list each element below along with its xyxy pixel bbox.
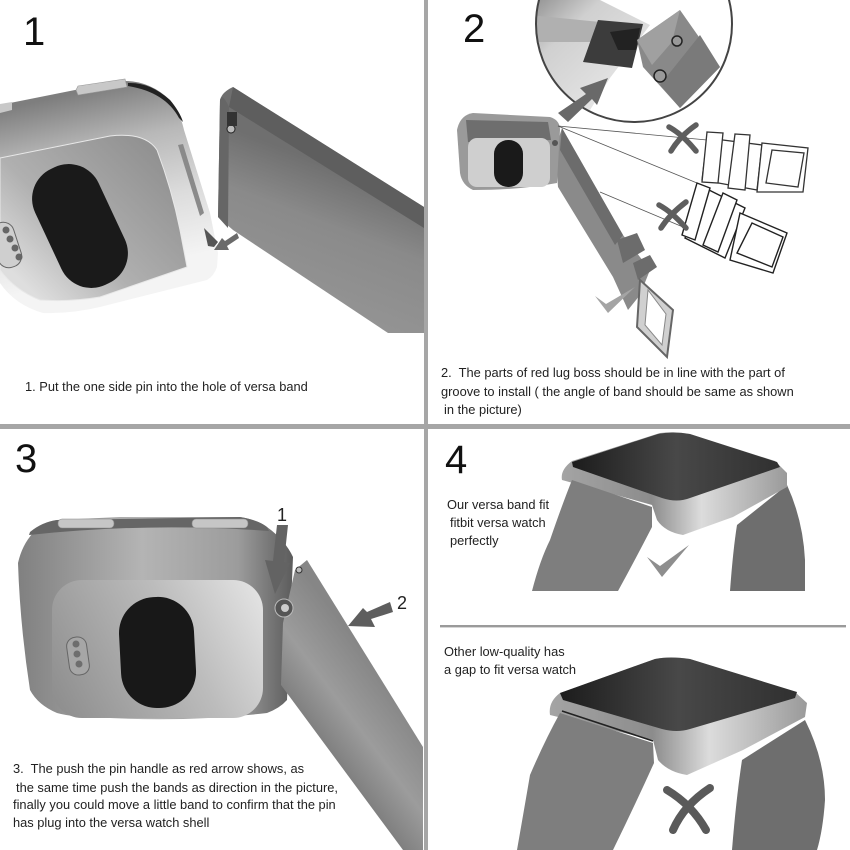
outlined band, upper (702, 132, 808, 192)
check mark, panel 4 (647, 545, 689, 577)
step number 2: 2 (463, 7, 485, 51)
step number 1: 1 (23, 10, 45, 54)
panel 3: push pin (13, 437, 423, 850)
panel 4: fit comparison: fitbit versa watch (450, 515, 546, 530)
correct band (555, 128, 650, 310)
outlined band, lower (682, 183, 787, 273)
panel 4: fit comparison: perfectly (450, 533, 499, 548)
label 2: 2 (397, 593, 407, 613)
thin guide lines (558, 126, 707, 227)
band clasp, correct (617, 233, 673, 357)
check mark (595, 287, 635, 313)
gap watch (517, 658, 825, 850)
panel 3: push pin: the same time push the bands as direction in the picture, (16, 780, 338, 795)
good fit watch (532, 432, 805, 591)
small watch (457, 113, 560, 190)
band, panel 3 (281, 560, 423, 850)
arrow 2, panel 3 (348, 602, 393, 627)
label 1: 1 (277, 505, 287, 525)
caption 2: 2. The parts of red lug boss should be in line with the part of (441, 365, 785, 380)
X mark, panel 4 (667, 788, 710, 830)
magnified detail circle (530, 0, 732, 122)
watch body, panel 3 (18, 517, 293, 719)
gap text: Other low-quality has (444, 644, 565, 659)
panel 2: alignment: groove to install ( the angle of band should be same as shown (441, 384, 794, 399)
fit text: Our versa band fit (447, 497, 550, 512)
step number 3: 3 (15, 437, 37, 481)
caption 1: 1. Put the one side pin into the hole of versa band (25, 379, 308, 394)
panel 1: insert pin (0, 10, 424, 394)
caption 3: 3. The push the pin handle as red arrow shows, as (13, 761, 304, 776)
pin (275, 567, 302, 617)
panel 2: alignment (441, 0, 808, 417)
watch body, panel 1 (0, 79, 218, 313)
panel 3: push pin: has plug into the versa watch shell (13, 815, 209, 830)
arrow to detail (558, 78, 608, 122)
X mark upper (669, 125, 696, 151)
arrow, panel 1 (214, 233, 239, 250)
divider inside panel 4 (440, 625, 846, 627)
arrow 1, panel 3 (265, 525, 290, 594)
step number 4: 4 (445, 438, 467, 482)
panel 2: alignment: in the picture) (444, 402, 522, 417)
band, panel 1 (218, 87, 424, 333)
panel 4: fit comparison: a gap to fit versa watch (444, 662, 576, 677)
panel 4: fit comparison (440, 432, 846, 850)
X mark lower (659, 202, 686, 228)
panel 3: push pin: finally you could move a little band to confirm that the pin (13, 797, 336, 812)
